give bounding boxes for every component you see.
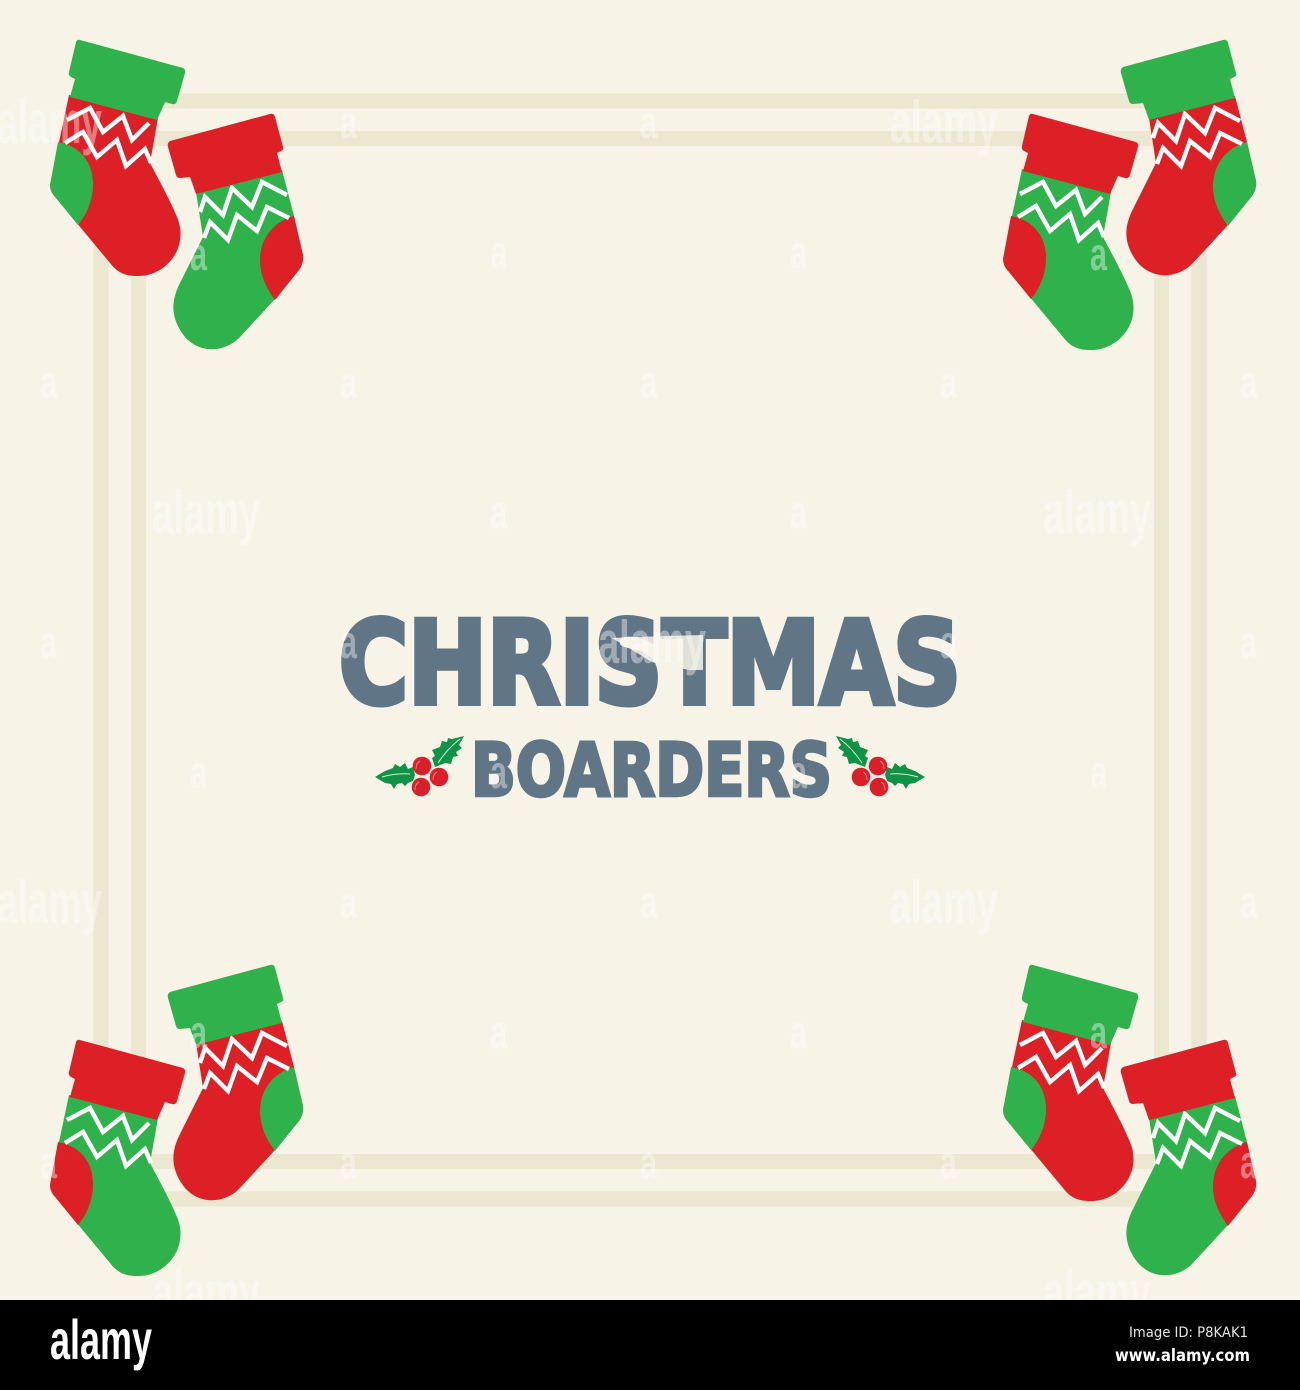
alamy watermarks: alamy [890, 869, 998, 936]
subtitle: BOARDERS [471, 728, 832, 814]
alamy watermarks: a [1090, 1006, 1107, 1058]
alamy watermarks: a [40, 1136, 57, 1188]
alamy watermarks: a [190, 1006, 207, 1058]
alamy watermarks: alamy [598, 609, 706, 676]
footer image id: Image ID: P8KAK1 [1129, 1325, 1248, 1341]
alamy watermarks: a [490, 746, 507, 798]
alamy watermarks: a [1090, 746, 1107, 798]
alamy watermarks: a [340, 96, 357, 148]
alamy watermarks: a [1240, 876, 1257, 928]
alamy watermarks: a [490, 226, 507, 278]
alamy watermarks: a [490, 1006, 507, 1058]
alamy watermarks: a [340, 616, 357, 668]
icon: holly right [836, 736, 925, 796]
alamy watermarks: alamy [890, 89, 998, 156]
alamy watermarks: alamy [0, 89, 102, 156]
alamy watermarks: alamy [1043, 479, 1151, 546]
alamy watermarks: alamy [152, 1259, 260, 1326]
alamy watermarks: a [640, 96, 657, 148]
alamy watermarks: a [640, 356, 657, 408]
stockings: top right [1003, 40, 1256, 350]
alamy watermarks: a [790, 226, 807, 278]
alamy watermarks: a [940, 1136, 957, 1188]
icon: holly left [375, 736, 464, 796]
alamy watermarks: a [640, 876, 657, 928]
alamy watermarks: a [1240, 616, 1257, 668]
alamy watermarks: a [490, 486, 507, 538]
alamy watermarks: a [790, 746, 807, 798]
double line frame [101, 101, 1199, 1199]
footer bar [0, 1300, 1300, 1390]
alamy watermarks: a [1240, 356, 1257, 408]
alamy watermarks: a [40, 356, 57, 408]
stockings: bottom right [1003, 965, 1256, 1275]
alamy watermarks: a [940, 356, 957, 408]
title: CHRISTMAS [339, 597, 961, 730]
alamy watermarks: a [790, 1006, 807, 1058]
watermark wash over title [612, 635, 703, 670]
alamy watermarks: a [340, 356, 357, 408]
alamy watermarks: a [1090, 228, 1107, 280]
footer logo: alamy [50, 1308, 152, 1371]
alamy watermarks: a [1240, 1136, 1257, 1188]
alamy watermarks: a [190, 746, 207, 798]
alamy watermarks: a [40, 616, 57, 668]
stockings: top left [50, 40, 303, 349]
alamy watermarks: a [940, 616, 957, 668]
alamy watermarks: a [340, 1136, 357, 1188]
alamy watermarks: a [190, 228, 207, 280]
alamy watermarks: a [640, 1136, 657, 1188]
alamy watermarks: alamy [1043, 1259, 1151, 1326]
alamy watermarks: alamy [0, 869, 102, 936]
footer url: www.alamy.com [1115, 1346, 1250, 1365]
alamy watermarks: a [340, 876, 357, 928]
stockings: bottom left [50, 965, 303, 1276]
alamy watermarks: alamy [152, 479, 260, 546]
alamy watermarks: a [790, 486, 807, 538]
